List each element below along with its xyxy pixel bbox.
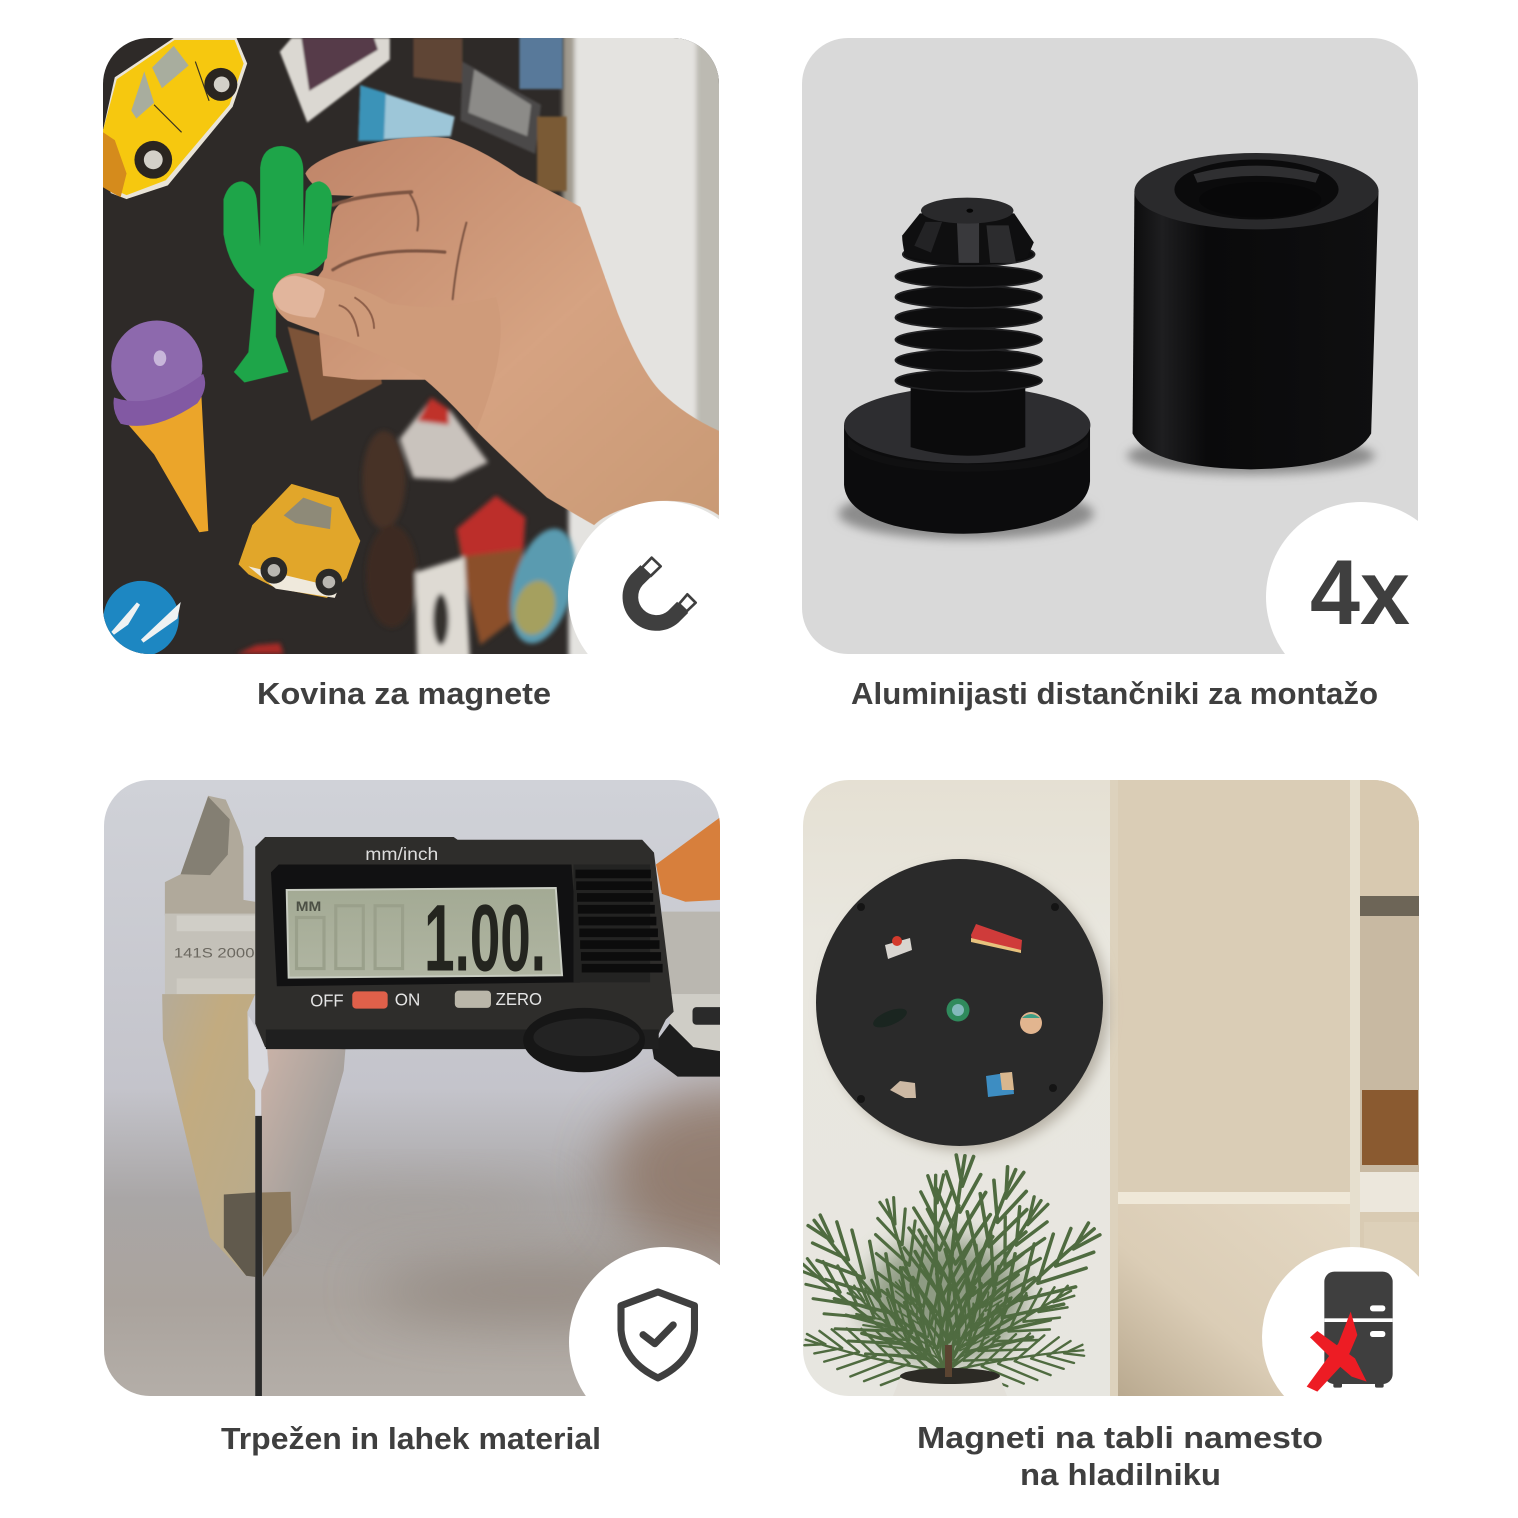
image: taxi magnet [239,484,360,598]
text: reading: 1.00. [424,886,546,991]
image: potted palm [803,1153,1102,1388]
panel: aluminium spacers [802,38,1418,654]
caption: durable material: Trpežen in lahek material [221,1421,601,1456]
icon badge: no fridge [1262,1247,1442,1427]
image: grill [573,864,663,982]
image: screw spacer [838,198,1094,539]
icon: fridge crossed out [1307,1272,1393,1392]
icon: magnet [630,558,696,623]
image: yellow car magnet [103,38,247,199]
image: caliper display body: ON [395,990,420,1010]
image: caliper display body: OFF [310,990,344,1010]
image: blue round magnet [103,581,179,656]
caption: magnets on board: na hladilniku [1020,1457,1221,1492]
image: nut spacer [1127,153,1379,474]
image: caliper display body [255,837,674,1072]
panel: caliper thickness [104,780,720,1396]
text: 4x: 4x [1310,542,1410,644]
image: souvenir magnets on board [871,924,1042,1098]
image: thumb [272,272,476,430]
icon badge: shield [569,1247,759,1437]
image: finger [656,817,720,902]
icon badge: 4x [1266,502,1456,692]
caption: metal for magnets: Kovina za magnete [257,676,551,711]
image: green cactus magnet [224,146,332,383]
caption: aluminium spacers: Aluminijasti distančniki za montažo [851,676,1378,711]
panel: magnets on metal board [103,38,719,654]
image: screw thread [895,243,1042,392]
image: purple ice cream magnet [111,320,208,532]
image: star-shaped magnet [288,327,382,421]
panel: board in kitchen [803,780,1419,1396]
image: faint LCD segments [297,906,403,969]
icon badge: magnet [568,501,758,691]
image: blurred souvenir magnets [237,397,587,667]
image: blurred magnets at top [280,34,567,191]
icon: shield with check [621,1292,694,1378]
image: board screws [857,903,1059,1103]
image: caliper display body: MM [296,898,321,914]
image: caliper jaws and blade [162,796,346,1396]
image: right beam [652,912,724,1077]
text: display units: mm/inch [365,844,438,864]
image: white wall [563,30,728,667]
caption: magnets on board [917,1420,1323,1492]
image: beige cabinets [1110,780,1419,1396]
image: caliper jaws and blade: 141S 2000 [174,945,255,961]
image: round board [816,859,1109,1151]
image: finger creases [333,192,466,299]
image: hand with fingers [292,137,719,525]
caption: magnets on board: Magneti na tabli namesto [917,1420,1323,1455]
image: caliper display body: ZERO [496,989,542,1009]
